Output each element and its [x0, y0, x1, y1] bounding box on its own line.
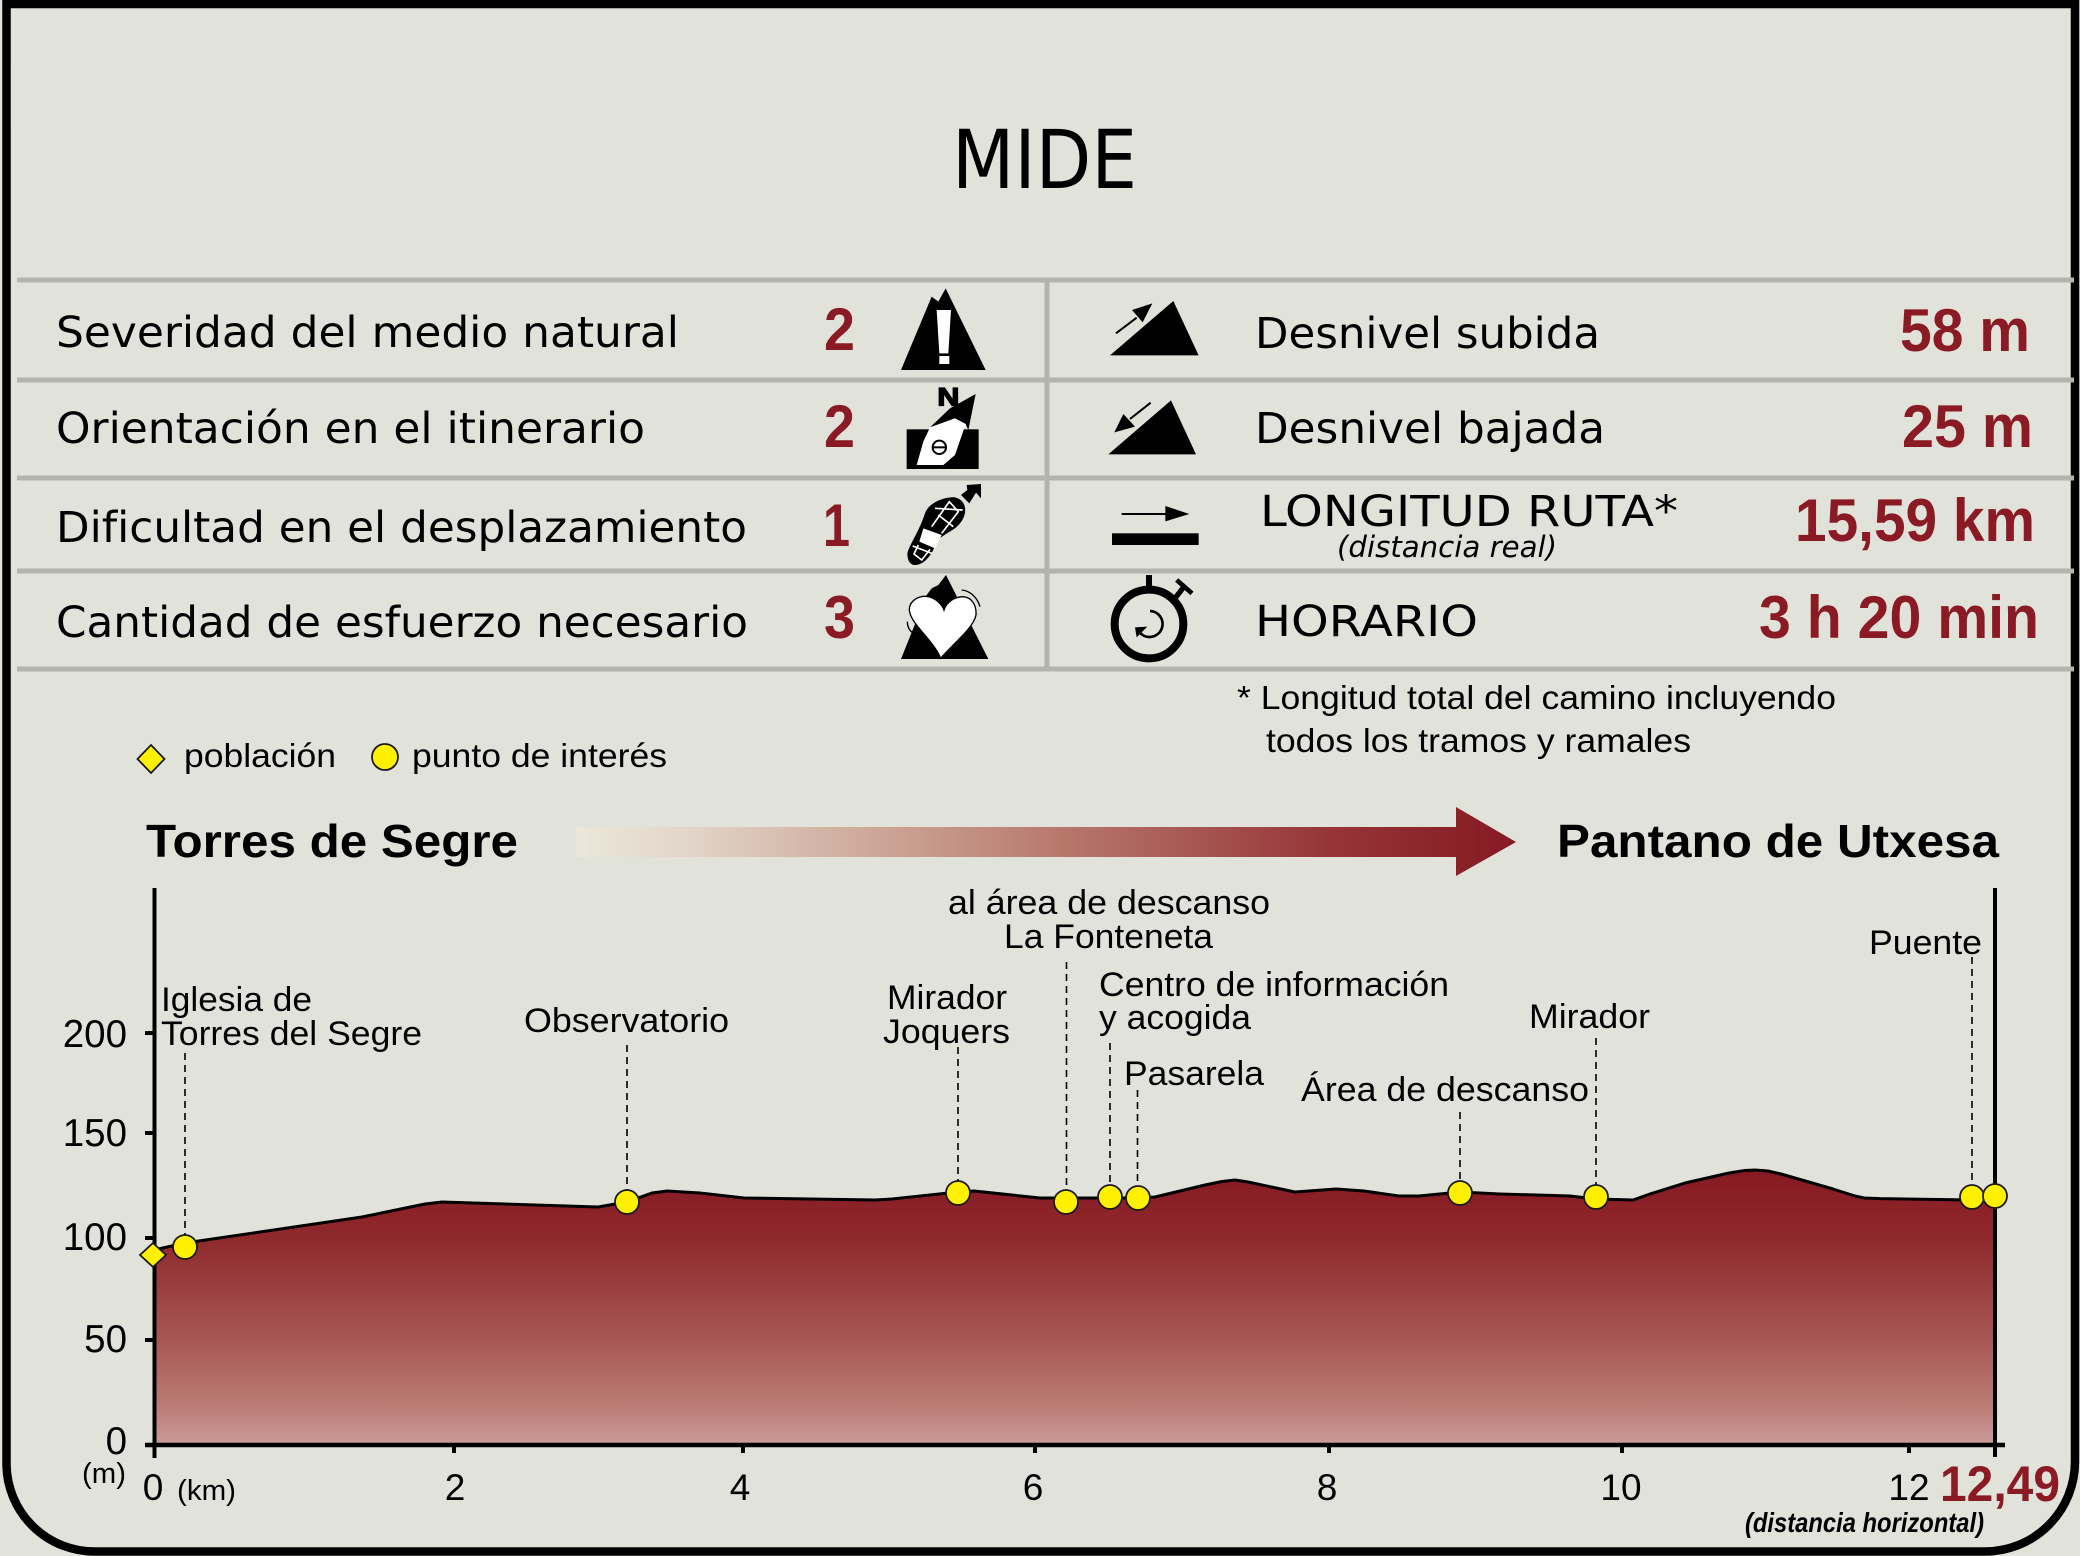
y axis unit: (m)	[82, 1458, 126, 1490]
poi labels: Iglesia de	[161, 981, 312, 1019]
total distance: 12,49	[1940, 1456, 2060, 1512]
label: longitud ruta: LONGITUD RUTA*	[1260, 487, 1678, 537]
y axis labels: 50	[84, 1318, 127, 1361]
poi labels: Joquers	[883, 1013, 1010, 1051]
x axis labels: 2	[445, 1467, 465, 1508]
poi labels: Mirador	[1529, 998, 1650, 1036]
icon: compass	[907, 384, 979, 469]
horizontal distance note: (distancia horizontal)	[1745, 1507, 1984, 1538]
label: distancia real: (distancia real)	[1337, 530, 1557, 564]
MIDE table grid	[17, 280, 2074, 669]
legend: población	[184, 737, 336, 774]
axes	[145, 888, 2005, 1458]
poi labels: Mirador	[887, 979, 1007, 1017]
label: severidad: Severidad del medio natural	[56, 308, 679, 358]
poi labels: al área de descanso	[948, 884, 1270, 922]
label: desnivel subida: Desnivel subida	[1255, 309, 1600, 359]
elevation chart	[63, 884, 2060, 1538]
x axis labels	[143, 1467, 1930, 1508]
value: orientacion: 2	[824, 393, 855, 460]
icon: severity mountain	[901, 288, 986, 370]
legend: punto de interés	[412, 737, 667, 774]
value: esfuerzo: 3	[824, 584, 855, 651]
icon: descent	[1108, 400, 1196, 454]
x axis labels: 4	[730, 1467, 750, 1508]
route start heading: Torres de Segre	[146, 815, 518, 867]
profile line	[154, 1170, 1995, 1250]
y axis labels: 100	[63, 1216, 127, 1259]
poi labels: y acogida	[1099, 999, 1251, 1037]
value: severidad: 2	[824, 296, 855, 363]
x axis labels: 12	[1888, 1467, 1930, 1508]
poi labels: Centro de información	[1099, 966, 1449, 1004]
footnote: todos los tramos y ramales	[1266, 722, 1691, 759]
label: orientacion: Orientación en el itinerario	[56, 404, 645, 454]
icon: heart mountain	[901, 575, 988, 659]
x axis labels: 6	[1023, 1467, 1043, 1508]
x axis labels: 10	[1600, 1467, 1642, 1508]
x axis unit: (km)	[177, 1475, 236, 1507]
panel: route stats	[1108, 297, 2039, 658]
poi labels: Área de descanso	[1301, 1071, 1589, 1109]
poi markers	[140, 1181, 2007, 1267]
label: dificultad: Dificultad en el desplazamiento	[56, 503, 747, 553]
value: dificultad: 1	[823, 492, 850, 559]
value: longitud: 15,59 km	[1795, 487, 2035, 554]
y axis labels: 200	[63, 1013, 127, 1056]
title: MIDE	[952, 114, 1137, 208]
icon: stopwatch	[1115, 575, 1192, 658]
panel: MIDE ratings	[56, 288, 988, 659]
route end heading: Pantano de Utxesa	[1557, 815, 1999, 867]
poi labels: Pasarela	[1124, 1055, 1264, 1093]
icon: boot sole	[907, 484, 981, 565]
y axis labels: 150	[63, 1112, 127, 1155]
arrow: route direction	[576, 807, 1516, 876]
leader lines	[185, 957, 1972, 1235]
value: desnivel bajada: 25 m	[1902, 393, 2033, 460]
poi labels: Torres del Segre	[161, 1015, 422, 1053]
legend	[138, 737, 667, 774]
poi labels: Observatorio	[524, 1002, 729, 1040]
label: horario: HORARIO	[1255, 597, 1478, 647]
value: desnivel subida: 58 m	[1900, 297, 2030, 364]
icon: length	[1112, 506, 1199, 545]
icon: ascent	[1110, 301, 1199, 355]
poi labels	[161, 884, 1982, 1109]
poi labels: La Fonteneta	[1004, 918, 1213, 956]
y axis labels	[63, 1013, 127, 1463]
x axis labels: 8	[1317, 1467, 1337, 1508]
footnote: * Longitud total del camino incluyendo	[1237, 679, 1836, 716]
label: desnivel bajada: Desnivel bajada	[1255, 404, 1605, 454]
poi labels: Puente	[1869, 924, 1982, 962]
label: esfuerzo: Cantidad de esfuerzo necesario	[56, 598, 748, 648]
y axis labels: 0	[106, 1420, 127, 1463]
profile area	[154, 1170, 1995, 1445]
x axis labels: 0	[143, 1467, 163, 1508]
value: horario: 3 h 20 min	[1759, 584, 2039, 651]
icon: compass: N	[937, 384, 959, 411]
footnote	[1237, 679, 1836, 759]
